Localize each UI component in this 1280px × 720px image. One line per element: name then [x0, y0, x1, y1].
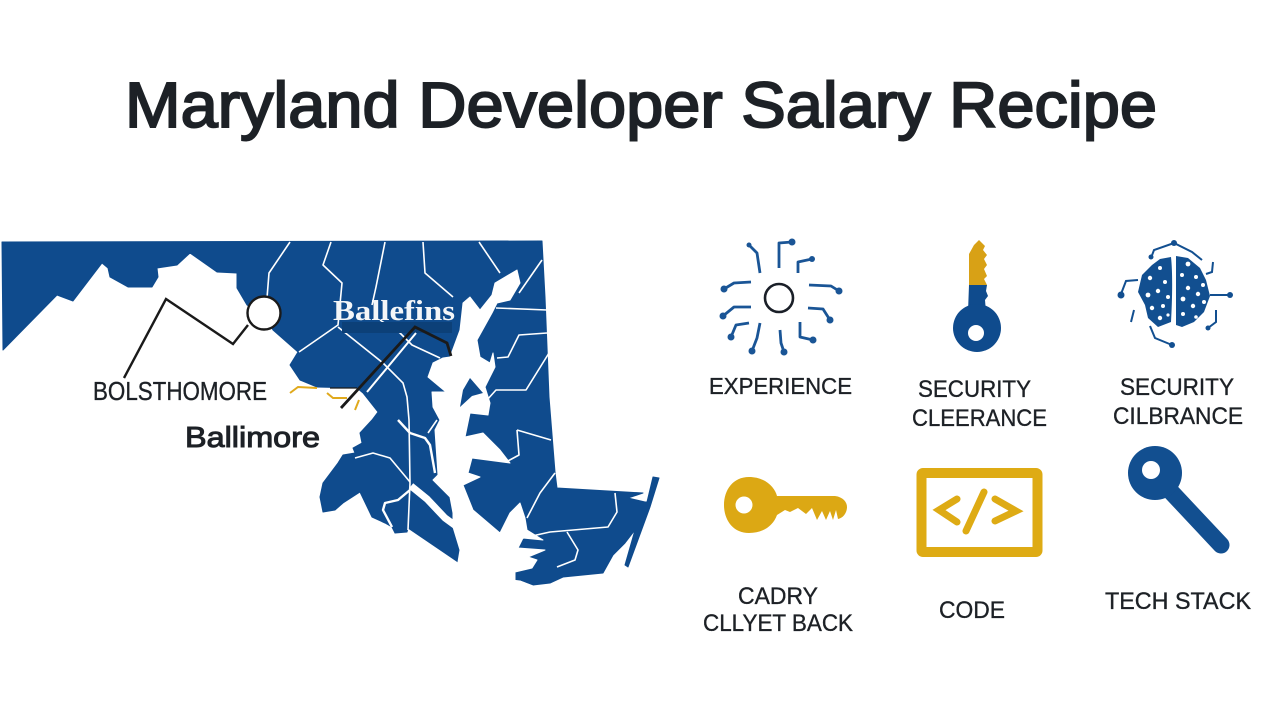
map: callout highlight [367, 333, 416, 392]
label: security clearance: SECURITY [918, 376, 1031, 403]
icon: code window [922, 473, 1038, 552]
map: callout line to Ballefins [341, 327, 451, 408]
icon: circuit [720, 238, 842, 356]
label: security cilbrance: CILBRANCE [1113, 403, 1243, 430]
icon: blue key [1128, 446, 1221, 545]
label: cadry clyet back: CLLYET BACK [703, 610, 853, 637]
map: shoreline stroke [330, 387, 357, 389]
map label: Bolsthomore: BOLSTHOMORE [93, 376, 267, 406]
map of Maryland with city callouts [2, 241, 659, 600]
label: tech stack: TECH STACK [1105, 588, 1251, 615]
label: security cilbrance: SECURITY [1120, 374, 1234, 401]
icon: vertical key [953, 240, 1001, 352]
label: code: CODE [939, 597, 1005, 624]
map: river [411, 486, 456, 526]
label: security clearance [912, 376, 1047, 432]
map label: Ballefins: Ballefins [333, 295, 455, 327]
map: callout line to Bolsthomore [124, 299, 248, 378]
map: label shadow [342, 322, 452, 333]
label: security clearance: CLEERANCE [912, 405, 1047, 432]
map: county borders [267, 242, 617, 567]
label: experience: EXPERIENCE [709, 373, 852, 399]
title: Maryland Developer Salary Recipe [125, 69, 1157, 141]
map: Chesapeake Bay [428, 270, 545, 600]
icon: brain [1118, 240, 1233, 348]
icon: gold key [724, 477, 847, 533]
map: location marker [248, 296, 280, 330]
map: inlet [460, 378, 483, 407]
label: security cilbrance [1113, 374, 1243, 430]
map label: Ballimore: Ballimore [185, 422, 320, 454]
map: state shape [2, 241, 659, 585]
map: gold road traces [290, 387, 359, 410]
label: cadry clyet back: CADRY [738, 583, 818, 610]
label: cadry clyet back [703, 583, 853, 637]
